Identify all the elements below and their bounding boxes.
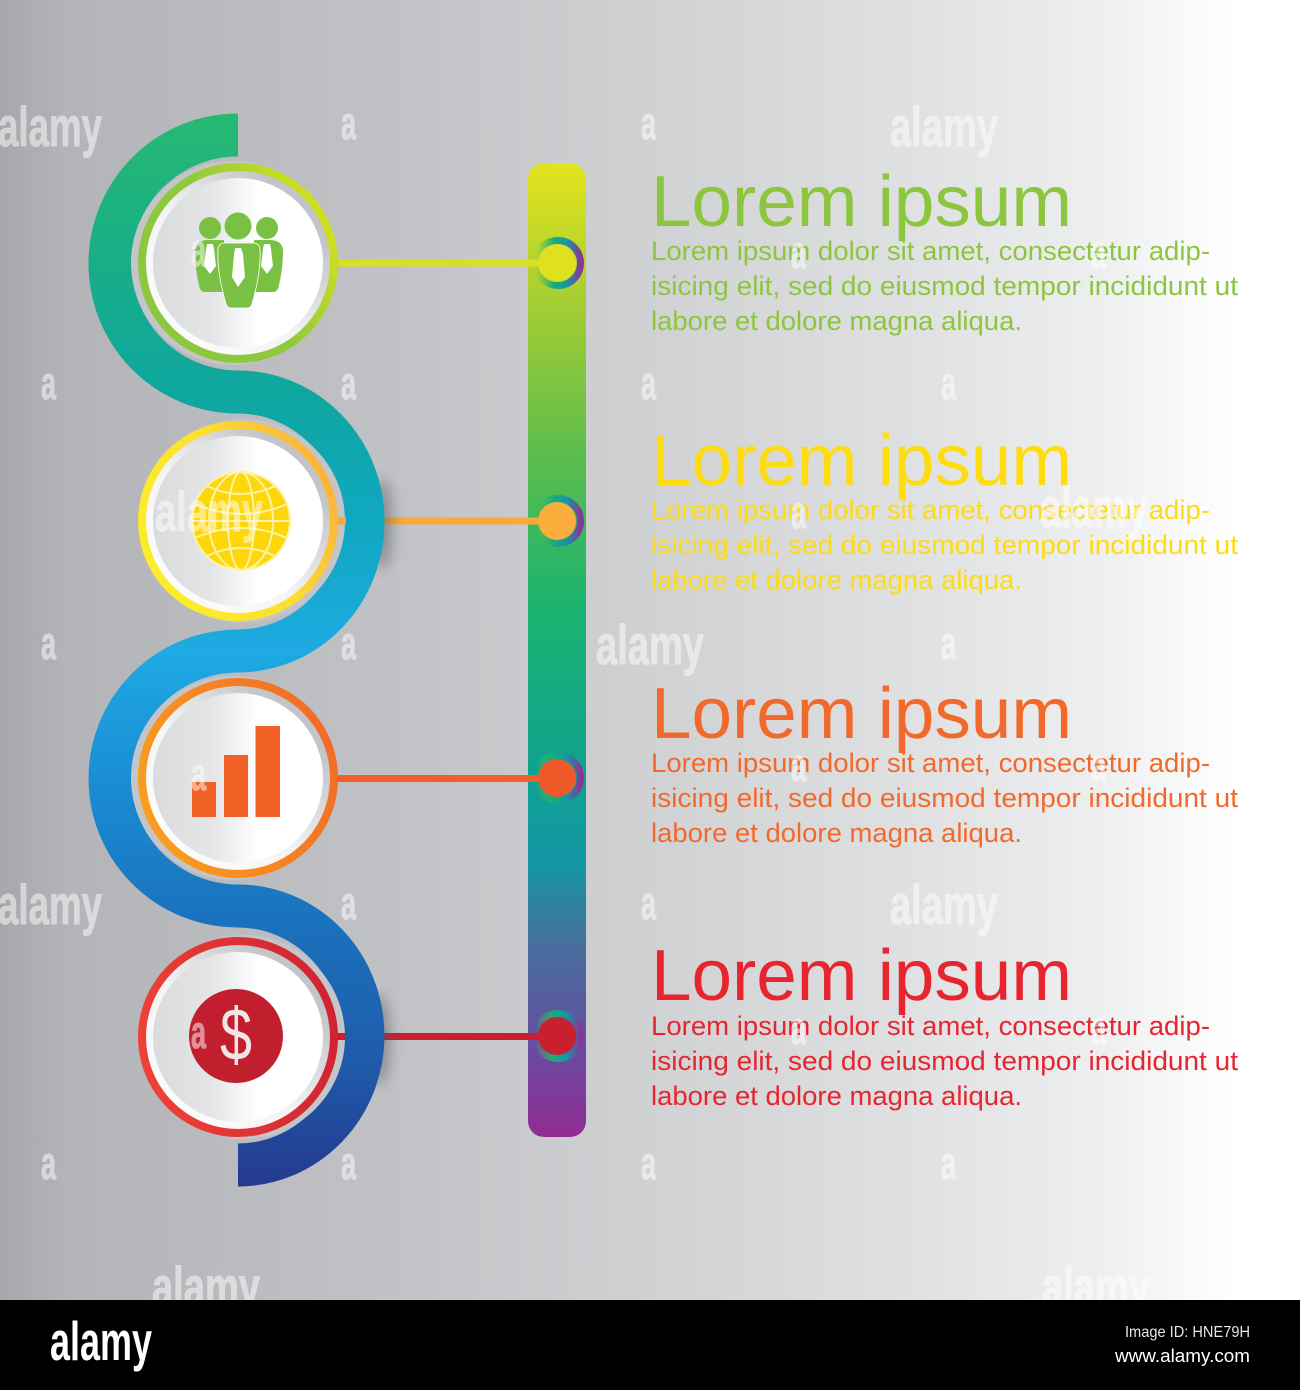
text block 4 (651, 936, 1239, 1111)
text block 1 (651, 162, 1239, 336)
watermarks: a (41, 357, 56, 409)
watermarks: alamy (890, 873, 998, 936)
watermarks: alamy (1040, 476, 1148, 539)
text block 4: Lorem ipsum dolor sit amet, consectetur adip- (651, 1011, 1210, 1041)
watermarks: a (41, 1137, 56, 1189)
text block 4: isicing elit, sed do eiusmod tempor incididunt ut (651, 1046, 1239, 1076)
footer bar (0, 1300, 1300, 1390)
icon: business team (195, 212, 283, 308)
text block 1: Lorem ipsum (651, 162, 1072, 242)
watermarks: a (791, 226, 806, 278)
text block 2: labore et dolore magna aliqua. (651, 565, 1022, 595)
text block 1: Lorem ipsum dolor sit amet, consectetur adip- (651, 236, 1210, 266)
watermarks: a (41, 617, 56, 669)
text block 4: Lorem ipsum (651, 936, 1072, 1016)
text block 2: Lorem ipsum dolor sit amet, consectetur adip- (651, 495, 1210, 525)
watermarks: a (791, 486, 806, 538)
text block 3: Lorem ipsum dolor sit amet, consectetur adip- (651, 748, 1210, 778)
watermarks: a (941, 617, 956, 669)
text block 3 (651, 674, 1239, 848)
watermarks: a (341, 877, 356, 929)
watermarks: alamy (596, 613, 704, 676)
watermarks: a (641, 877, 656, 929)
watermarks: a (191, 748, 206, 800)
watermarks: a (941, 1137, 956, 1189)
icon: dollar coin: $ (220, 993, 252, 1076)
watermarks: a (1091, 1002, 1106, 1054)
watermarks: a (641, 97, 656, 149)
watermarks: alamy (155, 480, 263, 543)
icon: globe (192, 472, 290, 570)
watermarks: a (341, 97, 356, 149)
node 4 (528, 1014, 580, 1058)
node 1 (528, 240, 580, 286)
watermarks (0, 95, 1150, 1318)
watermarks: a (641, 1137, 656, 1189)
watermarks: a (791, 1002, 806, 1054)
connector lines (338, 260, 543, 1040)
ribbon shadows (371, 478, 391, 1086)
watermarks: alamy (890, 95, 998, 158)
circle 3: bar chart (131, 676, 338, 880)
circle 4: dollar (138, 935, 346, 1139)
icon: dollar coin (189, 989, 283, 1083)
node 3 (528, 756, 580, 800)
footer image id and site: www.alamy.com (1114, 1346, 1250, 1366)
watermarks: a (191, 224, 206, 276)
footer image id and site: Image ID: HNE79H (1125, 1324, 1250, 1341)
watermarks: a (791, 739, 806, 791)
circle 1: team (131, 161, 338, 365)
watermarks: a (191, 1006, 206, 1058)
footer logo: alamy (50, 1310, 152, 1372)
watermarks: a (1091, 739, 1106, 791)
text block 2: Lorem ipsum (651, 421, 1072, 501)
watermarks: alamy (152, 1255, 260, 1318)
watermarks: a (1091, 226, 1106, 278)
icon: bars (192, 726, 280, 817)
text block 2 (651, 421, 1239, 595)
footer image id and site (1114, 1324, 1250, 1366)
watermarks: alamy (0, 873, 102, 936)
text block 1: isicing elit, sed do eiusmod tempor incididunt ut (651, 271, 1239, 301)
watermarks: a (641, 357, 656, 409)
text block 4: labore et dolore magna aliqua. (651, 1081, 1022, 1111)
watermarks: alamy (0, 95, 102, 158)
text block 3: labore et dolore magna aliqua. (651, 818, 1022, 848)
text block 2: isicing elit, sed do eiusmod tempor incididunt ut (651, 530, 1239, 560)
text block 1: labore et dolore magna aliqua. (651, 306, 1022, 336)
text block 3: Lorem ipsum (651, 674, 1072, 754)
serpentine ribbon (110, 135, 363, 1165)
watermarks: a (341, 1137, 356, 1189)
vertical gradient bar (528, 163, 586, 1137)
node 2 (528, 498, 580, 544)
watermarks: alamy (1042, 1255, 1150, 1318)
text block 3: isicing elit, sed do eiusmod tempor incididunt ut (651, 783, 1239, 813)
watermarks: a (941, 357, 956, 409)
watermarks: a (341, 617, 356, 669)
circle 2: globe (138, 419, 346, 623)
watermarks: a (341, 357, 356, 409)
